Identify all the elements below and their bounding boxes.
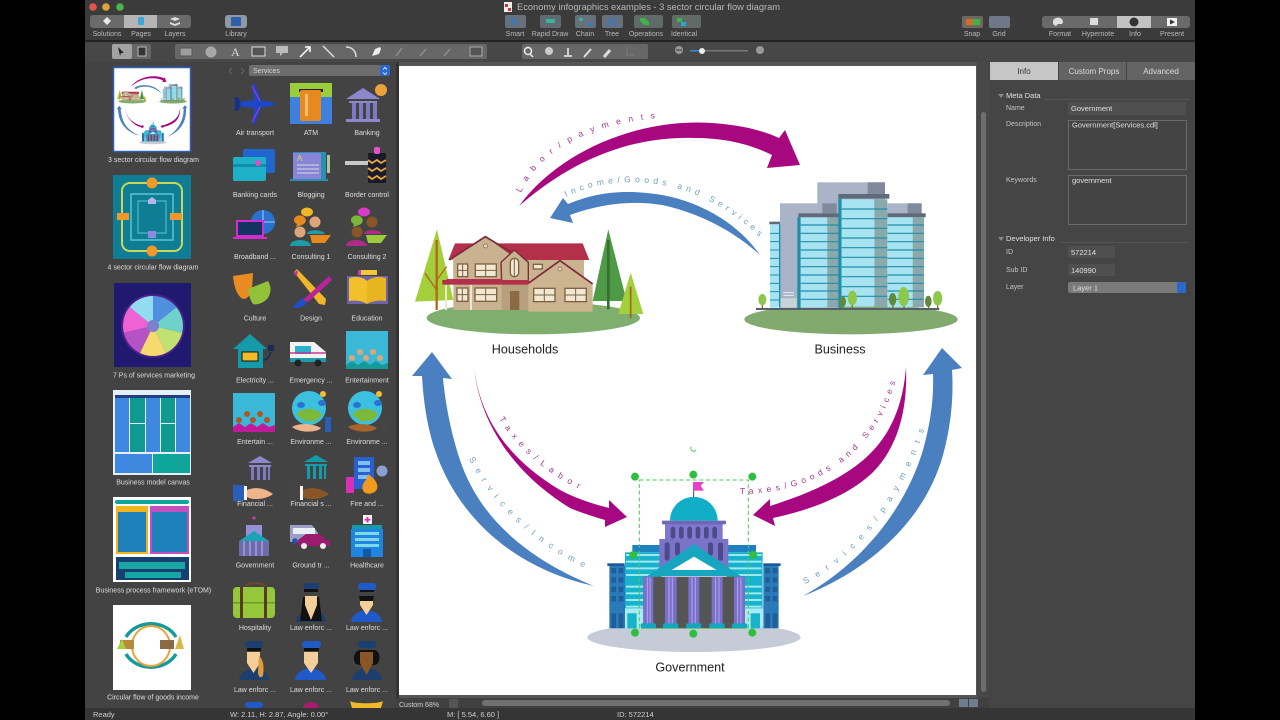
panel: diagram page xyxy=(399,66,976,695)
selection frame xyxy=(629,447,757,638)
library item: Ground tr xyxy=(290,525,330,570)
thumbnail: 4 sector circular flow diagram xyxy=(107,175,199,272)
thumbnail: 3 sector circular flow diagram xyxy=(108,68,199,164)
library item: Law enforc 2 xyxy=(346,583,388,632)
status bar xyxy=(85,708,1195,720)
canvas background xyxy=(396,62,989,708)
inspector switcher: Hypernote xyxy=(1082,31,1114,38)
meta data section: Government xyxy=(1071,104,1113,113)
developer info section: Developer Info xyxy=(1006,234,1055,243)
library item: Broadband xyxy=(233,210,276,261)
library item: Blogging: A xyxy=(297,154,303,163)
library item: Banking cards xyxy=(233,149,278,199)
library item: Entertain xyxy=(233,393,275,446)
library item: Air transport: Air transport xyxy=(236,130,274,137)
library item: Law enforc 3 xyxy=(234,641,276,694)
library item: Culture: Culture xyxy=(244,316,266,322)
library item: Financial 1 xyxy=(233,456,273,508)
library item: Entertainment: Entertainment xyxy=(345,378,389,384)
library item: Culture xyxy=(233,273,271,322)
library partial row xyxy=(245,701,383,708)
library item: Design: Design xyxy=(300,316,322,322)
library item: Law enforc 4: Law enforc ... xyxy=(290,687,332,694)
scrollbars and zoom control: Custom 68% xyxy=(399,702,439,709)
library item: Environme 2 xyxy=(346,391,388,446)
inspector tabs: Advanced xyxy=(1143,67,1179,76)
inspector tabs: Custom Props xyxy=(1069,67,1119,76)
caption: government: Government xyxy=(655,660,725,674)
label: services payments: Services/payments xyxy=(803,429,924,584)
thumbnail: 7 Ps of services marketing: 7 Ps of services marketing xyxy=(113,372,195,380)
inspector tabs xyxy=(990,62,1195,80)
view switcher xyxy=(90,15,191,38)
meta data section xyxy=(998,91,1189,224)
drawing tools: A xyxy=(231,45,240,59)
panel: page thumbnails xyxy=(85,62,223,708)
arrow: taxes goods and services xyxy=(753,367,906,526)
library item: Law enforc 4 xyxy=(290,641,332,694)
library item: Electricity xyxy=(233,334,274,384)
library item: Law enforc 2: Law enforc ... xyxy=(346,625,388,632)
window title: Economy infographics examples - 3 sector circular flow diagram xyxy=(517,2,780,12)
thumbnail: Business model canvas xyxy=(113,390,191,486)
library item: Consulting 1: Consulting 1 xyxy=(292,254,331,261)
label: income goods and services: Income/Goods and Services xyxy=(564,176,762,236)
library item: Consulting 2: Consulting 2 xyxy=(348,254,387,261)
library item: Healthcare xyxy=(350,515,384,570)
thumbnail: Business process framework (eTOM) xyxy=(96,497,211,594)
snap and grid buttons xyxy=(962,16,1010,38)
library item: Hospitality: Hospitality xyxy=(239,625,272,632)
library item: Law enforc 1 xyxy=(290,583,332,632)
meta data section: Meta Data xyxy=(1006,91,1041,100)
illustration: business office towers xyxy=(744,182,958,334)
thumbnail: 7 Ps of services marketing xyxy=(113,283,195,380)
library item: Environme 2: Environme ... xyxy=(346,439,388,446)
library item: Banking cards: Banking cards xyxy=(233,192,278,199)
arrow: services payments xyxy=(803,348,962,596)
meta data section: Government[Services.cdl] xyxy=(1072,120,1158,130)
view switcher: Pages xyxy=(131,31,151,38)
library item: ATM xyxy=(290,83,332,137)
arrow: labor payments xyxy=(519,122,800,206)
library item: Education: Education xyxy=(351,316,383,322)
library item: Law enforc 5 xyxy=(346,641,388,694)
library item: Consulting 2 xyxy=(346,208,387,261)
status bar: W: 2.11, H: 2.87, Angle: 0.00° xyxy=(230,710,328,719)
thumbnail: Business model canvas: Business model canvas xyxy=(116,480,190,486)
library item: Financial 2 xyxy=(289,455,332,508)
diagram tool buttons: Chain xyxy=(576,31,594,38)
meta data section: Keywords xyxy=(1006,177,1037,184)
status bar: ID: 572214 xyxy=(617,710,654,719)
snap and grid buttons: Grid xyxy=(992,31,1006,38)
arrow: services income xyxy=(412,352,594,586)
zoom slider xyxy=(675,46,764,54)
label: services income: Services/Income xyxy=(470,457,585,567)
label: labor payments: Labor/payments xyxy=(516,114,655,192)
diagram tool buttons: Tree xyxy=(605,31,619,38)
caption: households: Households xyxy=(492,342,558,356)
library item: Air transport xyxy=(235,84,275,137)
library header xyxy=(229,65,390,76)
label: taxes labor: Taxes/Labor xyxy=(500,416,580,488)
top toolbar xyxy=(85,0,1195,62)
library item: Design xyxy=(292,269,332,322)
thumbnail: Circular flow of goods income xyxy=(107,605,199,702)
snap and grid buttons: Snap xyxy=(964,31,980,38)
library button xyxy=(225,15,247,38)
library item: Education xyxy=(347,270,388,322)
inspector switcher xyxy=(1042,16,1190,38)
library item: Emergency xyxy=(289,342,333,384)
panel: info inspector xyxy=(989,62,1195,708)
arrow: taxes labor xyxy=(474,367,627,527)
curved labels xyxy=(470,114,924,584)
flow arrows xyxy=(412,122,962,596)
library header: Services xyxy=(253,68,280,75)
developer info section: Sub ID xyxy=(1006,267,1027,274)
meta data section: government xyxy=(1072,176,1113,185)
developer info section: 140990 xyxy=(1071,266,1096,275)
library item: Financial 1: Financial ... xyxy=(237,501,273,508)
caption: business: Business xyxy=(814,342,866,356)
arrow: income goods and services xyxy=(550,192,760,255)
library item: Government: Government xyxy=(236,562,274,570)
drawing tools xyxy=(175,44,487,59)
thumbnail: 4 sector circular flow diagram: 4 sector circular flow diagram xyxy=(107,264,199,272)
inspector switcher: Info xyxy=(1129,31,1141,38)
illustration: government building xyxy=(587,482,801,652)
library item: Border control xyxy=(345,147,389,199)
library item: Emergency: Emergency ... xyxy=(289,378,333,384)
thumbnail: Circular flow of goods income: Circular flow of goods income xyxy=(107,694,199,702)
panel: shape library xyxy=(223,62,396,708)
library item: Consulting 1 xyxy=(290,208,331,261)
library item: Financial 2: Financial s ... xyxy=(290,501,332,508)
thumbnail: Business process framework (eTOM): Business process framework (eTOM) xyxy=(96,588,211,594)
library item: Border control: Border control xyxy=(345,192,389,199)
status bar: M: [ 5.54, 6.60 ] xyxy=(447,710,499,719)
library item: Ground tr: Ground tr ... xyxy=(292,562,330,570)
diagram tool buttons xyxy=(505,15,701,38)
library item: Law enforc 5: Law enforc ... xyxy=(346,687,388,694)
library item: Law enforc 3: Law enforc ... xyxy=(234,687,276,694)
developer info section: Layer 1 xyxy=(1073,284,1098,292)
developer info section: ID xyxy=(1006,249,1013,256)
scrollbars and zoom control xyxy=(396,62,989,709)
library item: Banking: Banking xyxy=(354,130,380,137)
library item: Blogging: Blogging xyxy=(297,192,325,199)
library item: Environme 1: Environme ... xyxy=(290,439,332,446)
pointer tools xyxy=(112,44,151,59)
library item: Government xyxy=(236,516,274,570)
library item: Entertainment xyxy=(345,331,389,384)
library item: Hospitality xyxy=(233,583,275,632)
library item: Entertain: Entertain ... xyxy=(237,439,273,446)
label: taxes goods and services: Taxes/Goods and Services xyxy=(740,381,896,494)
library item: Broadband: Broadband ... xyxy=(234,254,276,261)
library item: Banking xyxy=(346,84,387,137)
library item: Healthcare: Healthcare xyxy=(350,562,384,570)
diagram tool buttons: Smart xyxy=(506,31,524,38)
library item: Environme 1 xyxy=(290,391,332,446)
library item: ATM: ATM xyxy=(304,130,318,137)
diagram tool buttons: Identical xyxy=(671,31,697,38)
library button: Library xyxy=(225,31,247,38)
library item: Law enforc 1: Law enforc ... xyxy=(290,625,332,632)
view switcher: Solutions xyxy=(93,31,122,38)
view tools xyxy=(522,44,648,59)
library item: Fire and: Fire and ... xyxy=(350,501,384,508)
developer info section: 572214 xyxy=(1071,248,1096,257)
diagram tool buttons: Operations xyxy=(629,31,664,38)
meta data section: Description xyxy=(1006,121,1041,128)
thumbnail: 3 sector circular flow diagram: 3 sector circular flow diagram xyxy=(108,157,199,164)
illustration: households house xyxy=(415,229,643,334)
diagram tool buttons: Rapid Draw xyxy=(532,31,569,38)
library item: Electricity: Electricity ... xyxy=(236,378,274,384)
inspector switcher: Present xyxy=(1160,31,1184,38)
window controls xyxy=(89,3,124,11)
developer info section: Layer xyxy=(1006,284,1024,291)
developer info section xyxy=(998,234,1189,293)
view switcher: Layers xyxy=(164,31,186,38)
inspector tabs: Info xyxy=(1017,67,1031,76)
meta data section: Name xyxy=(1006,105,1025,112)
inspector switcher: Format xyxy=(1049,31,1071,38)
library item: Blogging xyxy=(290,152,330,199)
library item: Fire and xyxy=(346,457,388,508)
status bar: Ready xyxy=(93,710,115,719)
